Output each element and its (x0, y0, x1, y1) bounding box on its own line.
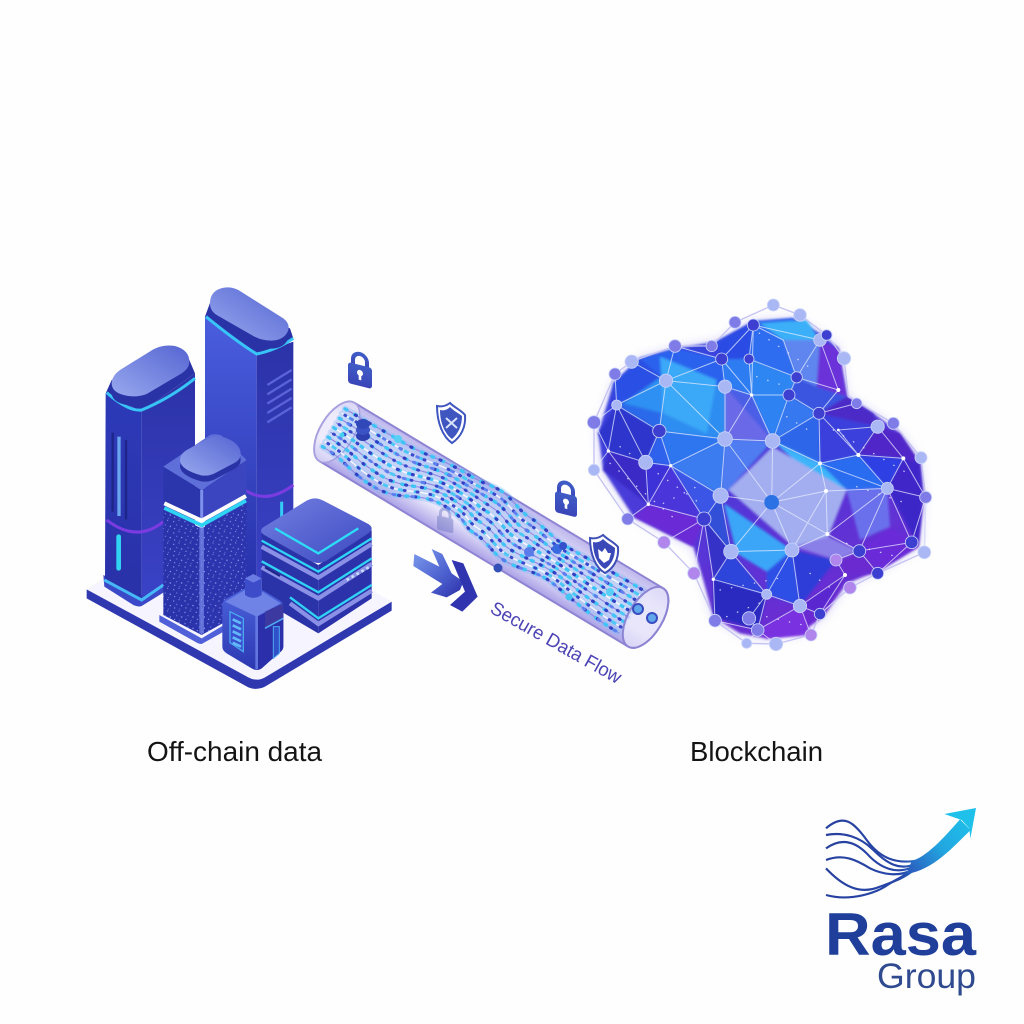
data clusters (340, 432, 614, 600)
arrow: data flow direction (413, 549, 478, 612)
caption: secure data flow: Secure Data Flow (487, 598, 625, 689)
logo mark: waves and arrow (826, 808, 976, 897)
central node (764, 495, 779, 510)
tall server tower (205, 287, 293, 590)
small battery unit (222, 574, 283, 670)
network edges (594, 325, 926, 644)
database icon in pipe (356, 419, 370, 441)
mesh base shape (598, 318, 923, 638)
logo wordmark: Rasa (825, 901, 977, 968)
illustration: blockchain mesh (587, 299, 932, 651)
data streams (318, 400, 650, 634)
speckles (610, 320, 913, 627)
left server tower (103, 345, 195, 606)
icon: shield with cross (437, 403, 465, 443)
isometric platform (87, 503, 392, 689)
logo: Rasa Group (825, 808, 977, 996)
pipe end nodes (633, 604, 657, 623)
icon: shield with emblem (590, 535, 618, 573)
soft halo (598, 318, 923, 638)
outer hull (594, 305, 926, 644)
pipe body (305, 394, 678, 655)
coloured facets (598, 318, 923, 638)
floating data node (494, 564, 502, 572)
network nodes (587, 299, 932, 651)
logo subtitle: Group (877, 957, 976, 996)
icon: padlock upper left (348, 351, 372, 389)
small glowing nodes (607, 388, 905, 581)
label: off-chain data: Off-chain data (147, 736, 323, 767)
ghost lock icon (437, 507, 453, 534)
illustration: secure data pipe (305, 394, 678, 655)
middle speckled tower (159, 434, 247, 644)
label: blockchain: Blockchain (690, 736, 823, 767)
stacked server block (261, 498, 372, 633)
illustration: off-chain data center (87, 287, 392, 689)
icon: padlock right (555, 480, 577, 517)
